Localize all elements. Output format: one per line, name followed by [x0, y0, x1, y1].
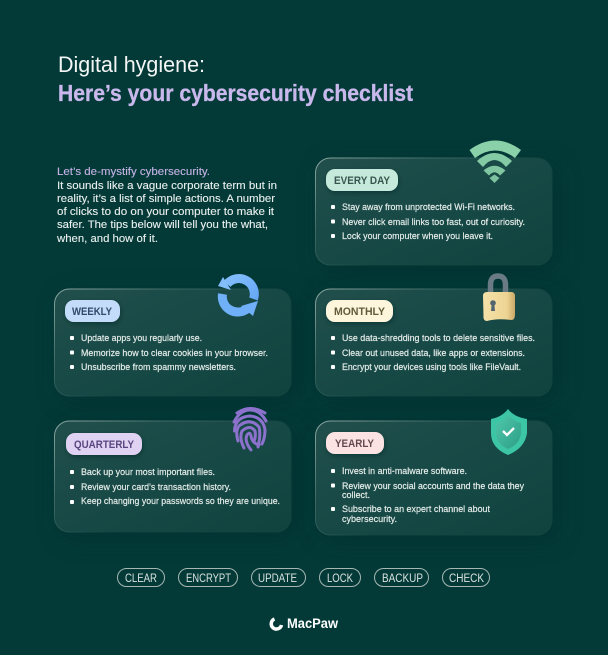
checklist: every day: Never click email links too fast, out of curiosity.	[342, 217, 525, 227]
badge: yearly	[326, 432, 384, 454]
keyword pills: CLEAR	[125, 573, 157, 585]
intro text block: reality, it’s a list of simple actions. A number	[57, 193, 275, 205]
panel: monthly	[316, 276, 558, 402]
intro text block: Let’s de-mystify cybersecurity.	[57, 166, 210, 178]
icon: wifi	[470, 140, 521, 183]
keyword pills: LOCK	[327, 573, 353, 585]
panel: weekly	[54, 277, 297, 402]
checklist: weekly	[70, 333, 268, 372]
badge: every day: EVERY DAY	[334, 175, 391, 187]
panel: yearly	[316, 409, 558, 541]
badge: yearly: YEARLY	[335, 438, 375, 450]
keyword pills: BACKUP	[382, 573, 423, 585]
checklist: yearly	[331, 466, 524, 524]
checklist: yearly: collect.	[342, 490, 370, 500]
checklist: every day	[331, 202, 525, 241]
badge: every day	[326, 169, 398, 191]
badge: quarterly	[66, 433, 142, 455]
icon: padlock	[483, 276, 515, 321]
title	[58, 52, 413, 106]
checklist: quarterly: Back up your most important files.	[81, 467, 215, 477]
checklist: every day: Stay away from unprotected Wi-Fi networks.	[342, 202, 515, 212]
badge: monthly	[326, 300, 393, 322]
logo: MacPaw: MacPaw	[287, 616, 338, 631]
badge: quarterly: QUARTERLY	[74, 439, 135, 451]
checklist: yearly: Review your social accounts and the data they	[342, 481, 524, 491]
keyword pills	[118, 568, 490, 586]
badge: weekly	[65, 300, 120, 322]
panel: every day	[316, 140, 558, 271]
checklist: monthly	[331, 333, 535, 372]
keyword pills: CHECK	[449, 573, 484, 585]
checklist: quarterly	[70, 467, 280, 506]
checklist: weekly: Unsubscribe from spammy newsletters.	[81, 362, 236, 372]
checklist: yearly: Invest in anti-malware software.	[342, 466, 467, 476]
badge: weekly: WEEKLY	[72, 306, 113, 318]
checklist: weekly: Update apps you regularly use.	[81, 333, 202, 343]
keyword pills: ENCRYPT	[186, 573, 231, 585]
keyword pills: UPDATE	[258, 573, 297, 585]
checklist: monthly: Encrypt your devices using tools like FileVault.	[342, 362, 521, 372]
checklist: quarterly: Keep changing your passwords so they are unique.	[81, 496, 280, 506]
title: Here’s your cybersecurity checklist	[58, 80, 413, 106]
checklist: monthly: Clear out unused data, like apps or extensions.	[342, 348, 525, 358]
intro text block: safer. The tips below will tell you the what,	[57, 219, 268, 231]
icon: refresh arrows	[218, 277, 258, 316]
intro text block	[56, 166, 277, 245]
checklist: yearly: cybersecurity.	[342, 514, 397, 524]
checklist: yearly: Subscribe to an expert channel about	[342, 504, 490, 514]
panel: quarterly	[54, 408, 297, 538]
title: Digital hygiene:	[58, 52, 205, 77]
badge: monthly: MONTHLY	[334, 306, 386, 318]
checklist: weekly: Memorize how to clear cookies in your browser.	[81, 348, 268, 358]
checklist: every day: Lock your computer when you leave it.	[342, 231, 493, 241]
intro text block: It sounds like a vague corporate term but in	[57, 180, 277, 192]
checklist: quarterly: Review your card’s transaction history.	[81, 482, 231, 492]
icon: shield	[491, 409, 527, 455]
intro text block: when, and how of it.	[56, 233, 158, 245]
checklist: monthly: Use data-shredding tools to delete sensitive files.	[342, 333, 535, 343]
icon: fingerprint	[234, 408, 266, 450]
intro text block: of clicks to do on your computer to make it	[57, 206, 275, 218]
